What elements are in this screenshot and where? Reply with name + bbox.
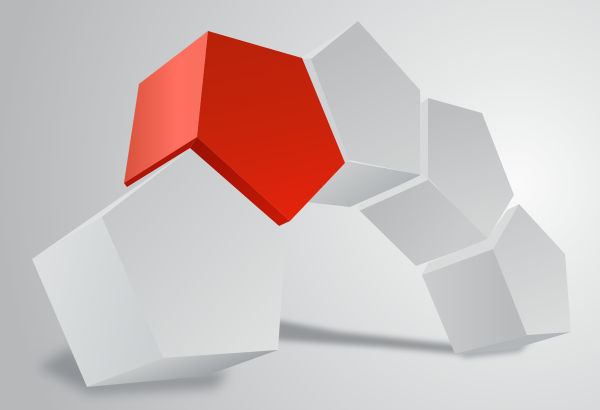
left face — [32, 217, 163, 387]
block: grey pentagon third — [358, 98, 514, 266]
bevel strip — [298, 58, 350, 165]
lower face — [359, 179, 489, 266]
block: grey pentagon second from red — [298, 21, 423, 207]
left face — [124, 31, 208, 183]
front face — [428, 98, 514, 240]
block: grey pentagon fourth — [422, 204, 571, 354]
shadow: arch on the floor — [275, 320, 460, 354]
left face — [422, 249, 527, 354]
top-light sliver — [298, 21, 358, 60]
bevel strip — [420, 98, 428, 180]
top-light sliver — [422, 204, 519, 275]
underside face — [305, 160, 423, 207]
front face — [102, 149, 286, 358]
shadow: big block — [38, 347, 230, 394]
front face — [493, 204, 571, 335]
block: large grey pentagon — [32, 149, 286, 387]
top-light sliver — [32, 149, 190, 259]
dark lower edge left — [124, 137, 197, 187]
light sliver — [358, 174, 428, 211]
front face — [311, 21, 422, 175]
underside face — [87, 350, 278, 387]
front face — [197, 31, 345, 221]
underside face — [455, 332, 571, 354]
block: red pentagon — [124, 31, 345, 226]
shadow: small right block — [455, 342, 530, 358]
dark lower edge right — [190, 137, 290, 226]
